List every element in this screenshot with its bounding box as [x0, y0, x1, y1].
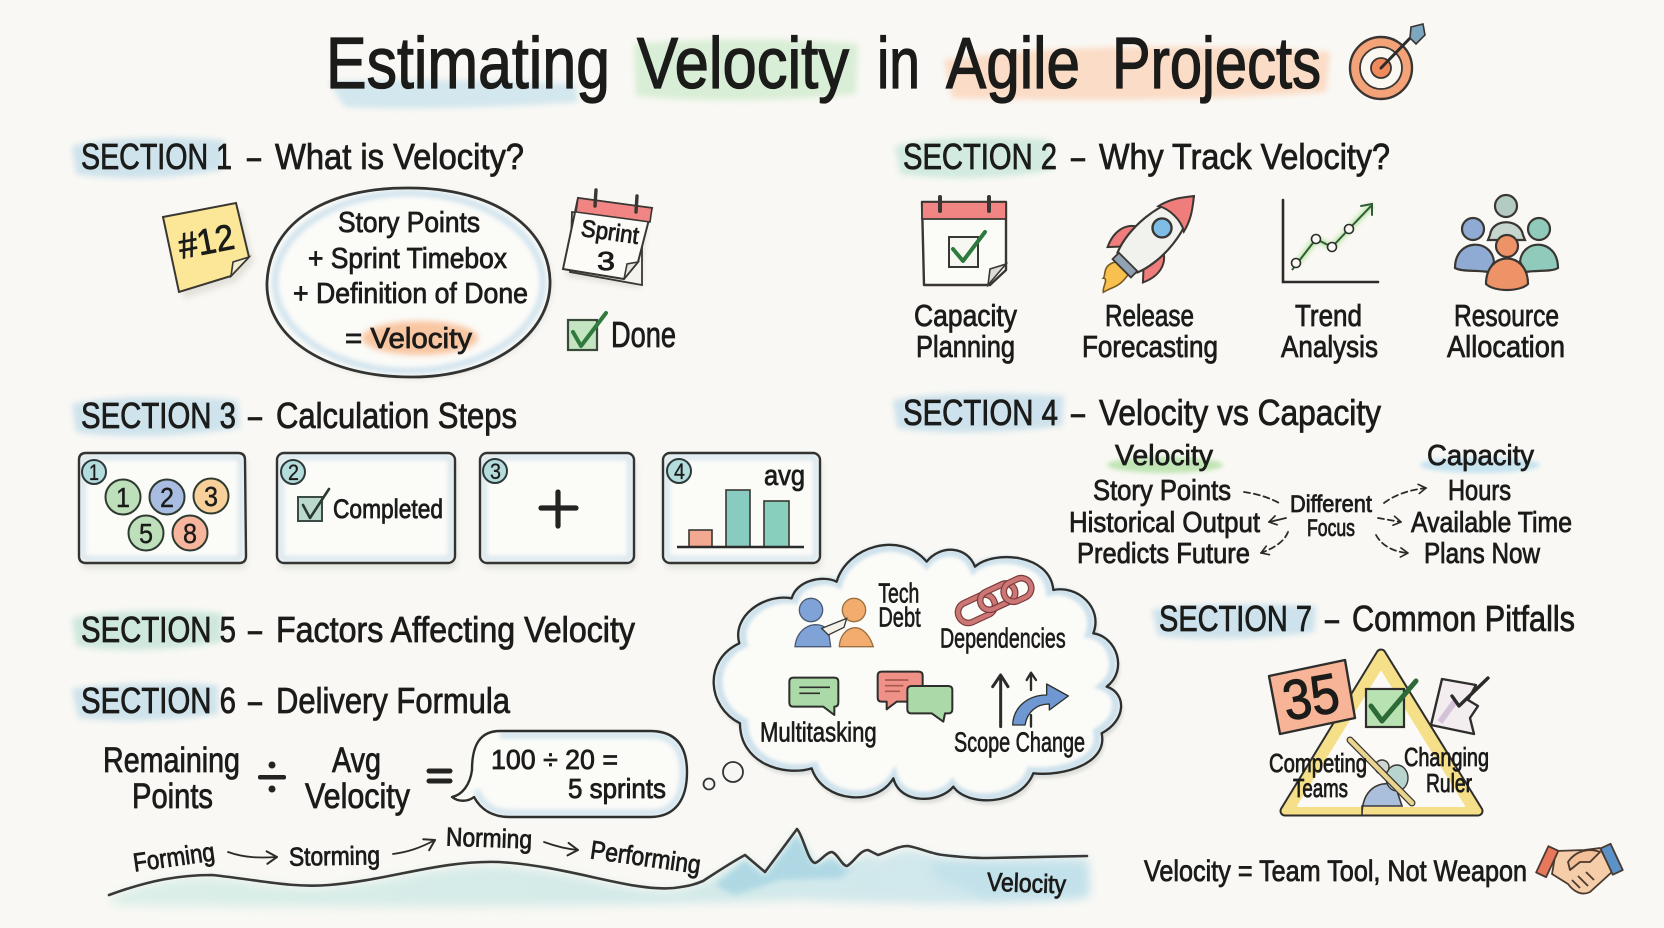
- capacity column: Plans Now: [1424, 538, 1541, 570]
- bar chart: [677, 490, 804, 547]
- formula bubble: Story Points: [338, 207, 480, 239]
- capacity column: Available Time: [1411, 507, 1572, 539]
- step 4 card: avg: [764, 460, 805, 492]
- label: dependencies: Dependencies: [940, 622, 1066, 653]
- stage: storming: Storming: [289, 840, 380, 872]
- icon: green checkmark box: [1366, 681, 1416, 727]
- capacity column: [1411, 440, 1572, 570]
- thought dots: [704, 762, 743, 790]
- icon: sticky note #12: #12: [175, 216, 238, 267]
- step 1 card: [79, 453, 247, 569]
- capacity column: Capacity: [1427, 440, 1534, 472]
- title text: Velocity: Velocity: [637, 24, 849, 104]
- formula bubble: + Sprint Timebox: [308, 243, 507, 275]
- section 3 heading: Calculation Steps: [276, 395, 517, 436]
- equals sign: [429, 771, 450, 781]
- panel: velocity vs capacity: [1069, 440, 1572, 570]
- speech bubble result: [452, 731, 687, 817]
- title highlight: Agile Projects: [944, 47, 1330, 100]
- section 1 heading: What is Velocity?: [275, 136, 524, 177]
- icon: rocket: [1080, 176, 1214, 310]
- label: competing teams: Competing: [1269, 748, 1367, 778]
- icon: capacity calendar: [922, 197, 1006, 285]
- section 4 heading: SECTION 4: [903, 392, 1058, 433]
- peak wash: [715, 834, 868, 895]
- section 2 heading: Why Track Velocity?: [1099, 136, 1390, 177]
- title highlight: Estimating: [328, 80, 578, 108]
- formula: avg velocity: Velocity: [305, 777, 410, 816]
- curve label: velocity: Velocity: [987, 867, 1067, 899]
- done checkbox: Done: [611, 314, 676, 355]
- label: competing teams: Teams: [1293, 773, 1348, 803]
- label: resource allocation: [1447, 298, 1565, 364]
- icon: trend chart: [1283, 200, 1378, 282]
- icon: multitasking chat: [789, 672, 952, 722]
- label: release forecasting: Release: [1105, 298, 1194, 333]
- step 4 card: 4: [674, 459, 685, 484]
- title text: Projects: Projects: [1112, 24, 1321, 104]
- label: release forecasting: Forecasting: [1082, 329, 1218, 364]
- section 6 heading: SECTION 6: [81, 680, 236, 721]
- step 3 card: [480, 453, 636, 569]
- section 5 heading: –: [248, 609, 262, 650]
- icon: chain dependencies: [955, 575, 1035, 626]
- right wash: [930, 862, 1086, 898]
- section 6 heading: –: [248, 680, 262, 721]
- center label: different focus: Focus: [1307, 515, 1355, 542]
- step 1 card: 8: [183, 518, 197, 549]
- title: [326, 24, 1425, 108]
- section 7 heading: Common Pitfalls: [1352, 598, 1575, 639]
- section 1 heading: SECTION 1: [81, 136, 232, 177]
- label: trend analysis: [1281, 298, 1378, 364]
- curve line: [109, 829, 1087, 895]
- section 4 heading: [893, 392, 1381, 433]
- closing message: Velocity = Team Tool, Not Weapon: [1144, 855, 1527, 888]
- velocity column: Historical Output: [1069, 507, 1260, 539]
- label: tech debt: Tech: [878, 578, 919, 609]
- icon: scope change arrows: [993, 673, 1068, 727]
- velocity column: Story Points: [1093, 475, 1231, 507]
- icon: ruler and person: [1350, 740, 1412, 815]
- team stage curve: [109, 822, 1090, 907]
- center label: different focus: [1290, 491, 1372, 542]
- warning triangle: [1285, 654, 1478, 811]
- section 5 heading: Factors Affecting Velocity: [276, 609, 635, 650]
- capacity column: Hours: [1448, 475, 1511, 507]
- step 1 card: 3: [204, 481, 218, 512]
- title text: Estimating: Estimating: [326, 24, 610, 104]
- label: multitasking: Multitasking: [760, 717, 877, 748]
- label: tech debt: Debt: [878, 602, 921, 633]
- arrow: norming to performing: [544, 842, 578, 850]
- section 7 heading: [1152, 598, 1575, 639]
- section 7 heading: –: [1325, 598, 1339, 639]
- title text: in: in: [877, 24, 920, 104]
- label: capacity planning: Planning: [916, 329, 1015, 364]
- icon: sprint 3 calendar: Sprint: [579, 215, 641, 250]
- formula: remaining points: Points: [132, 777, 213, 816]
- label: trend analysis: Analysis: [1281, 329, 1378, 364]
- label: tech debt: [878, 578, 921, 633]
- speech bubble result: 100 ÷ 20 =: [491, 744, 618, 775]
- arrow: storming to norming: [393, 840, 435, 854]
- formula bubble: + Definition of Done: [293, 278, 528, 310]
- icon: score card 35: 35: [1278, 661, 1344, 732]
- step 1 card: 1: [116, 482, 130, 513]
- velocity column: Predicts Future: [1077, 538, 1250, 570]
- step 2 card: 2: [288, 460, 299, 485]
- title text: Agile: Agile: [946, 24, 1080, 104]
- formula bubble: [267, 188, 552, 379]
- center label: different focus: Different: [1290, 491, 1372, 518]
- stage: performing: Performing: [589, 835, 703, 880]
- panel: calculation steps: [79, 453, 822, 569]
- section 5 heading: [72, 609, 635, 650]
- label: changing ruler: Ruler: [1426, 768, 1472, 798]
- icon: sprint 3 calendar: 3: [597, 246, 615, 276]
- icon: sticky note #12: [163, 203, 254, 299]
- stage: forming: Forming: [131, 836, 217, 878]
- formula: remaining points: [103, 741, 240, 816]
- icon: tech debt people: [795, 598, 873, 647]
- section 5 heading: SECTION 5: [81, 609, 236, 650]
- section 4 heading: Velocity vs Capacity: [1099, 392, 1381, 433]
- orange highlight behind velocity: [362, 321, 478, 355]
- panel: factors cloud: [714, 545, 1123, 805]
- speech bubble result: 5 sprints: [568, 773, 666, 804]
- step 1 card: 1: [89, 460, 99, 485]
- section 1 heading: [72, 136, 524, 178]
- title highlight: Velocity: [634, 40, 858, 100]
- panel: common pitfalls: [1269, 654, 1489, 815]
- formula: remaining points: Remaining: [103, 741, 240, 780]
- section 3 heading: [72, 395, 517, 436]
- section 6 heading: Delivery Formula: [276, 680, 511, 721]
- label: scope change: Scope Change: [954, 727, 1085, 758]
- step 2 card: Completed: [333, 494, 443, 524]
- section 6 heading: [72, 680, 511, 721]
- icon: sprint 3 calendar: [563, 190, 652, 288]
- formula: avg velocity: Avg: [332, 741, 381, 780]
- label: release forecasting: [1082, 298, 1218, 364]
- velocity column: [1069, 440, 1260, 570]
- label: trend analysis: Trend: [1295, 298, 1362, 333]
- cloud shape: [714, 545, 1123, 805]
- divide sign: [258, 762, 286, 792]
- arrow: forming to storming: [228, 852, 277, 857]
- section 2 heading: –: [1071, 136, 1085, 177]
- section 2 heading: SECTION 2: [903, 136, 1057, 177]
- step 1 card: 2: [160, 482, 174, 513]
- step 1 card: 5: [139, 518, 153, 549]
- icon: team of people: [1455, 195, 1558, 290]
- section 3 heading: –: [248, 395, 262, 436]
- section 1 heading: –: [247, 136, 261, 177]
- velocity column: Velocity: [1115, 440, 1213, 472]
- label: capacity planning: Capacity: [914, 298, 1017, 333]
- label: resource allocation: Resource: [1454, 298, 1559, 333]
- formula bubble: = Velocity: [345, 323, 473, 355]
- label: changing ruler: Changing: [1404, 742, 1489, 772]
- step 2 card: [277, 453, 457, 569]
- curve wash: [109, 832, 1090, 907]
- icon: target with arrow: [1350, 24, 1425, 99]
- panel: delivery formula: [103, 731, 743, 817]
- icon: handshake: [1536, 844, 1623, 894]
- done checkbox: [568, 313, 676, 355]
- label: resource allocation: Allocation: [1447, 329, 1565, 364]
- section 7 heading: SECTION 7: [1159, 598, 1312, 639]
- icon: torn checklist: [1431, 678, 1488, 734]
- step 4 card: [663, 453, 822, 569]
- section 4 heading: –: [1071, 392, 1085, 433]
- section 2 heading: [895, 136, 1390, 178]
- step 3 card: 3: [490, 459, 501, 484]
- label: capacity planning: [914, 298, 1017, 364]
- label: changing ruler: [1404, 742, 1489, 798]
- label: competing teams: [1269, 748, 1367, 803]
- stage: norming: Norming: [446, 822, 533, 854]
- panel: what is velocity: [163, 188, 676, 379]
- panel: why track velocity: [914, 176, 1565, 364]
- section 3 heading: SECTION 3: [81, 395, 236, 436]
- formula: avg velocity: [305, 741, 410, 816]
- arrows from different focus: [1244, 488, 1426, 553]
